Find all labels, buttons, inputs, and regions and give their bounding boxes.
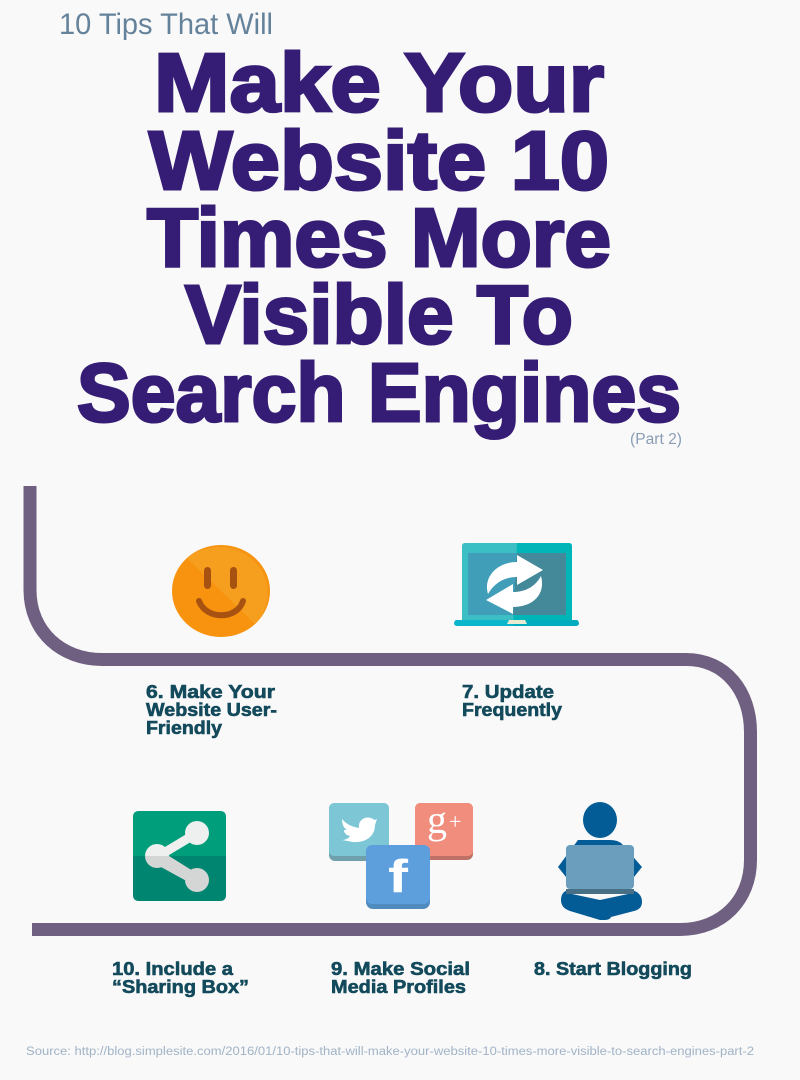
icon: google plus tile: + [449,809,461,834]
source: Source: http://blog.simplesite.com/2016/01/10-tips-that-will-make-your-website-10-times-more-visible-to-search-engines-part-2 [26,1046,754,1058]
label: tip 6: 6. Make Your [146,681,275,702]
part label: (Part 2) [630,431,682,448]
icon: twitter tile [329,803,389,861]
icon: person blogging on laptop [558,802,642,920]
icon: google plus tile [415,797,473,860]
icon: google plus tile: g [427,797,447,842]
label: tip 6 [146,681,277,738]
title: Website 10 [149,114,609,207]
title: Make Your [154,36,604,129]
title: Search Engines [77,346,681,439]
title: Times More [147,191,611,284]
label: tip 7: Frequently [462,699,563,720]
label: tip 8: 8. Start Blogging [534,958,692,979]
label: tip 10: “Sharing Box” [112,976,249,997]
icon: social media tiles [329,797,473,909]
icon: smiley [172,545,270,637]
icon: share box [133,811,226,901]
icon: facebook tile: f [388,850,409,902]
icon: facebook tile [366,845,430,909]
subtitle: 10 Tips That Will [59,8,273,41]
label: tip 10 [112,958,249,997]
label: tip 7: 7. Update [462,681,554,702]
label: tip 7 [462,681,563,720]
connector path [30,486,750,930]
label: tip 9: 9. Make Social [331,958,470,979]
label: tip 9: Media Profiles [331,976,466,997]
icon: laptop with refresh arrows [454,543,579,626]
title [77,36,681,439]
title: Visible To [185,268,573,361]
label: tip 10: 10. Include a [112,958,234,979]
label: tip 6: Friendly [146,717,223,738]
label: tip 6: Website User- [146,699,277,720]
label: tip 9 [331,958,470,997]
